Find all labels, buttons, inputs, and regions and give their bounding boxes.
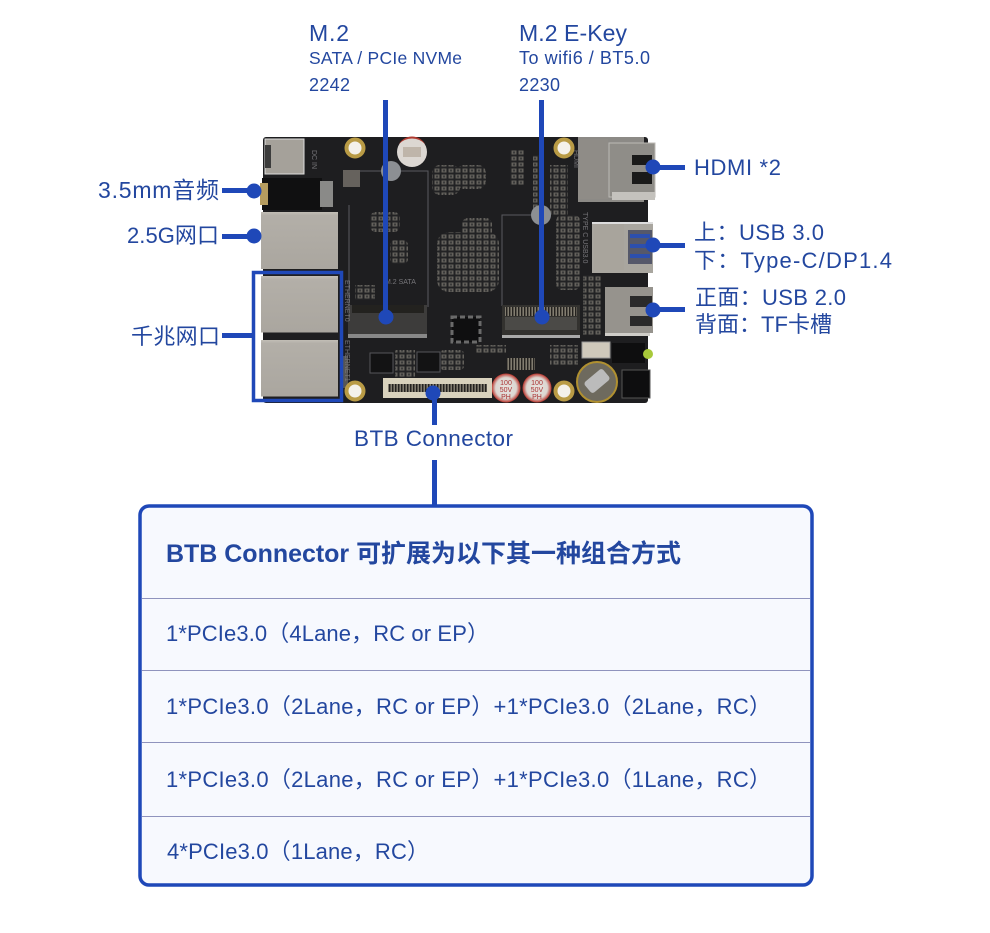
M.2 heading: 2242	[309, 75, 350, 95]
ethernet port 2.5G	[261, 212, 338, 269]
audio jack	[260, 178, 333, 210]
panel heading: BTB Connector 可扩展为以下其一种组合方式	[166, 539, 681, 568]
label: USB 3.0 and Type-C: 上：USB 3.0	[694, 220, 824, 245]
M.2 slot	[348, 305, 427, 338]
label: 3.5mm audio: 3.5mm音频	[98, 177, 219, 203]
capacitors: PH	[532, 394, 542, 401]
label: USB 2.0 and TF slot	[695, 285, 846, 337]
mounting holes	[346, 140, 572, 400]
M.2 E-Key heading: 2230	[519, 75, 560, 95]
option 1: 1*PCIe3.0（4Lane，RC or EP）	[166, 621, 489, 646]
panel: BTB Connector options	[140, 506, 812, 885]
HDMI ports	[578, 137, 655, 202]
M.2 heading	[309, 20, 462, 95]
label: HDMI: HDMI *2	[694, 155, 781, 180]
silkscreen labels: TYPE C USB3.0	[581, 212, 588, 263]
silkscreen labels: DC IN	[310, 150, 317, 169]
label: USB 3.0 and Type-C	[694, 220, 892, 273]
capacitors: 50V	[531, 387, 544, 394]
M.2 E-Key heading: To wifi6 / BT5.0	[519, 48, 650, 68]
side jack and button	[612, 343, 650, 398]
silkscreen labels: M.2 SATA	[385, 279, 416, 286]
capacitors	[381, 136, 617, 402]
M.2 heading: M.2	[309, 20, 349, 46]
label: USB 2.0 and TF slot: 正面：USB 2.0	[695, 285, 846, 310]
option 2: 1*PCIe3.0（2Lane，RC or EP）+1*PCIe3.0（2Lane，RC）	[166, 694, 771, 719]
M.2 E-Key heading: M.2 E-Key	[519, 20, 628, 46]
M.2 heading: SATA / PCIe NVMe	[309, 48, 462, 68]
capacitors: 100	[500, 380, 512, 387]
center chip	[452, 317, 480, 342]
small connector	[582, 342, 610, 358]
ethernet port 2	[261, 340, 338, 396]
silkscreen labels: HDMI	[572, 150, 579, 168]
silkscreen labels: ETHERNET0	[343, 280, 350, 322]
capacitors: 100	[531, 380, 543, 387]
label: gigabit ethernet: 千兆网口	[131, 324, 220, 349]
LED	[643, 349, 653, 359]
label: BTB Connector: BTB Connector	[354, 426, 514, 451]
silkscreen labels	[310, 150, 588, 382]
connector lines and dots	[222, 100, 685, 506]
capacitors: 50V	[500, 387, 513, 394]
SMD component clusters	[342, 150, 601, 388]
blue bracket around gigabit ports	[254, 272, 342, 400]
DC jack	[265, 139, 304, 174]
USB 2.0 port	[605, 287, 653, 336]
circuit board	[260, 136, 655, 403]
option 4: 4*PCIe3.0（1Lane，RC）	[167, 839, 429, 864]
USB 3.0 port and Type-C	[592, 222, 653, 273]
label: USB 2.0 and TF slot: 背面：TF卡槽	[695, 312, 832, 337]
silkscreen labels: ETHERNET1	[343, 340, 350, 382]
BTB connector socket	[383, 378, 492, 398]
bottom chips	[370, 352, 440, 373]
M.2 E-Key slot	[502, 305, 580, 338]
option 3: 1*PCIe3.0（2Lane，RC or EP）+1*PCIe3.0（1Lane，RC）	[166, 767, 771, 792]
label: 2.5G ethernet: 2.5G网口	[127, 223, 219, 248]
capacitors: PH	[501, 394, 511, 401]
ethernet port 1	[261, 276, 338, 332]
M.2 E-Key heading	[519, 20, 650, 95]
label: USB 3.0 and Type-C: 下：Type-C/DP1.4	[694, 248, 892, 273]
